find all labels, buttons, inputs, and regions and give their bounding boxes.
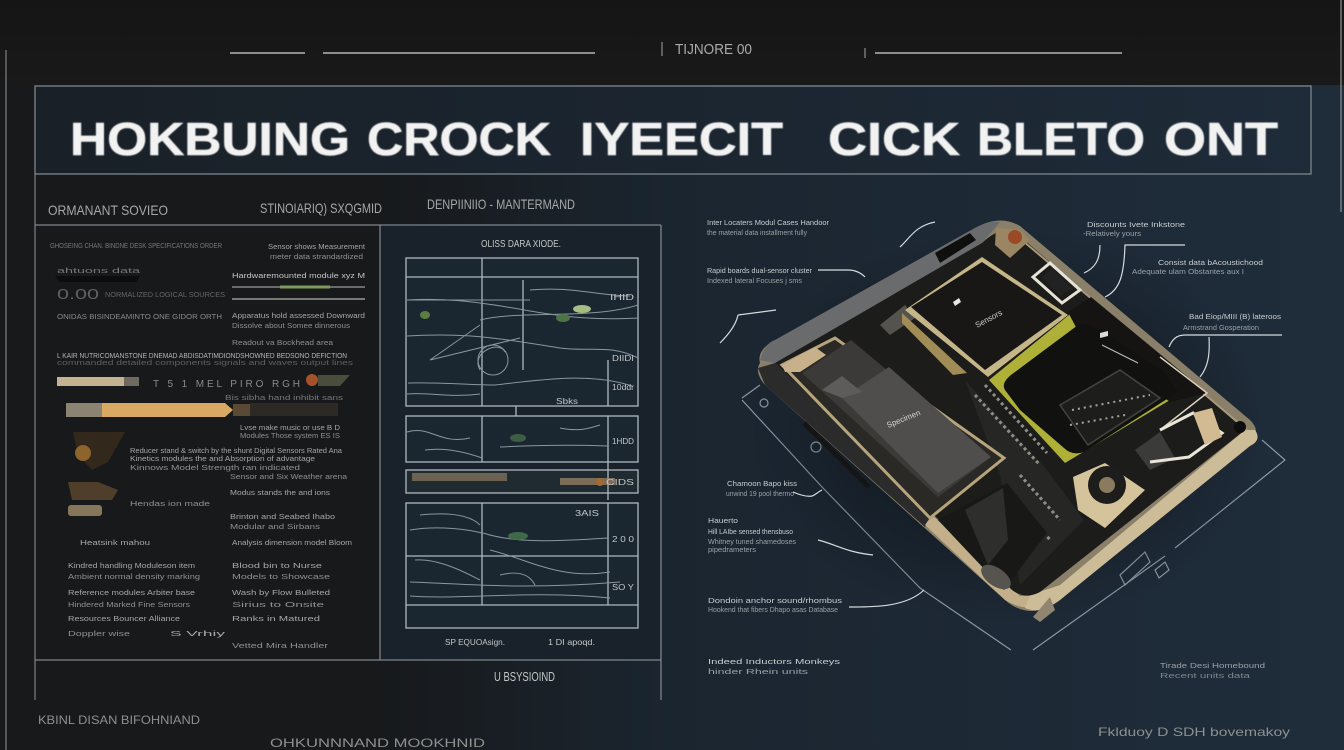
main chip — [905, 257, 1068, 377]
diagram labels — [445, 239, 635, 684]
section headings: ORMANANT SOVIEO — [48, 202, 168, 218]
title — [70, 113, 1278, 165]
callouts right: Adequate ulam Obstantes aux I — [1132, 267, 1244, 276]
bottom text: KBINL DISAN BIFOHNIAND — [38, 713, 200, 727]
yellow layer — [989, 310, 1175, 463]
left column text: Vetted Mira Handler — [232, 641, 329, 650]
left column sliders — [55, 276, 365, 299]
bottom text: Fklduoy D SDH bovemakoy — [1098, 725, 1290, 739]
section headings: STINOIARIQ) SXQGMID — [260, 200, 382, 216]
left column text: GHOSEING CHAN. BINDNE DESK SPECIFICATIONS ORDER — [50, 241, 222, 250]
callouts right: Indeed Inductors Monkeys — [708, 657, 840, 666]
gold connector strip — [902, 313, 967, 375]
bottom text: OHKUNNNAND MOOKHNID — [270, 736, 485, 750]
callouts right: pipedrameters — [708, 545, 756, 554]
left column text: Doppler wise — [68, 629, 130, 638]
diagram labels: IHID — [610, 293, 634, 302]
lower-left edge — [758, 363, 935, 527]
callouts right: -Relatively yours — [1083, 229, 1141, 238]
left column text: Resources Bouncer Alliance — [68, 614, 180, 623]
callouts right: Chamoon Bapo kiss — [727, 479, 797, 488]
chart: technical diagram — [406, 258, 638, 628]
dark upper right area — [1068, 297, 1207, 402]
left column text: Sensor shows Measurement — [268, 242, 366, 251]
lower-right rim — [1025, 430, 1258, 610]
device: tablet cutaway: Sensors — [974, 308, 1004, 330]
inner black — [775, 230, 1245, 596]
left column text: Apparatus hold assessed Downward — [232, 311, 365, 320]
callouts right — [707, 218, 1281, 680]
callouts right: Consist data bAcoustichood — [1158, 258, 1263, 267]
device: tablet cutaway: Specimen — [885, 408, 922, 430]
bottom text — [38, 713, 1290, 750]
left column text: Modular and Sirbans — [230, 522, 320, 531]
callouts right: hinder Rhein units — [708, 667, 808, 676]
instrument bars — [57, 374, 350, 417]
left column text: NORMALIZED LOGICAL SOURCES — [105, 290, 225, 299]
callouts right: Bad Eiop/MIII (B) lateroos — [1189, 312, 1281, 321]
battery compartment — [782, 338, 1004, 518]
logic board traces — [965, 380, 1084, 585]
left column text: T 5 1 MEL PIRO RGH — [153, 379, 303, 390]
title: HOKBUING — [70, 113, 350, 165]
left column text: commanded detailed components signals and waves output lines — [57, 358, 353, 367]
callouts right: Dondoin anchor sound/rhombus — [708, 596, 842, 605]
diagram labels: SP EQUOAsign. — [445, 638, 505, 647]
callouts right: Tirade Desi Homebound — [1160, 661, 1265, 670]
left column text: Wash by Flow Bulleted — [232, 588, 330, 597]
left column text: Dissolve about Somee dinnerous — [232, 321, 350, 330]
left column text: M RA HA INFAWNED — [265, 409, 338, 418]
left column text: ahtuons data — [57, 266, 142, 275]
camera module — [1073, 463, 1145, 528]
left column text: meter data strandardized — [270, 252, 363, 261]
left column text: Hendas ion made — [130, 499, 210, 508]
left column text: Readout va Bockhead area — [232, 338, 334, 347]
left column text: Modus stands the and ions — [230, 488, 330, 497]
diagram labels: 1 DI apoqd. — [548, 638, 595, 647]
callouts right: Rapid boards dual-sensor cluster — [707, 266, 812, 275]
left column text: Ranks in Matured — [232, 614, 320, 623]
left column text: Kinnows Model Strength ran indicated — [130, 463, 300, 472]
diagram highlights — [412, 305, 615, 540]
upper slope — [760, 222, 1000, 363]
left column text: S Vrhiy — [170, 629, 226, 638]
left column text: Reference modules Arbiter base — [68, 588, 195, 597]
callouts right: Hauerto — [708, 516, 738, 525]
leader lines — [720, 222, 1282, 607]
top band — [0, 0, 1344, 85]
section headings — [48, 196, 575, 218]
left column text: Bis sibha hand inhibit sans — [225, 393, 343, 402]
left column text: Kindred handling Moduleson item — [68, 561, 195, 570]
left column text: ONIDAS BISINDEAMINTO ONE GIDOR ORTH — [57, 312, 222, 321]
lower rim clasp — [1033, 597, 1055, 622]
left column text: Lvse make music or use B D — [240, 423, 341, 432]
title: IYEECIT — [580, 113, 783, 165]
title: ONT — [1164, 113, 1278, 165]
callouts right: Armstrand Gosperation — [1183, 323, 1259, 332]
left column text: L KAIR NUTRICOMANSTONE DNEMAD ABDISDATIMDIONDSHOWNED BEDSONO DEFICTION — [57, 351, 347, 360]
left column text: Hardwaremounted module xyz M — [232, 271, 365, 280]
left column text: Analysis dimension model Bloom — [232, 538, 352, 547]
title: CROCK — [367, 113, 551, 165]
device blueprint outline — [742, 385, 1285, 650]
device: tablet cutaway — [745, 220, 1275, 625]
left column text: Sensor and Six Weather arena — [230, 472, 348, 481]
diagram labels: 1HDD — [612, 437, 634, 446]
callouts right: Discounts Ivete Inkstone — [1087, 220, 1185, 229]
title: CICK — [828, 113, 960, 165]
side buttons — [804, 423, 869, 487]
diagram labels: DIIDI — [612, 354, 634, 363]
callouts right: Inter Locaters Modul Cases Handoor — [707, 218, 829, 227]
device body — [758, 220, 1256, 611]
left column text: Reducer stand & switch by the shunt Digital Sensors Rated Ana — [130, 446, 343, 455]
callouts right: Whitney tuned shamedoses — [708, 537, 796, 546]
title: BLETO — [977, 113, 1145, 165]
diagram labels: OLISS DARA XIODE. — [481, 239, 561, 250]
callouts right: Hill LAIbe sensed thensbuso — [708, 527, 793, 536]
left column text: 0.00 — [57, 286, 99, 303]
callouts right: unwind 19 pool thermo — [726, 489, 794, 498]
left column text: Ambient normal density marking — [68, 572, 200, 581]
diagram labels: Sbks — [556, 397, 578, 406]
black pouch — [1004, 324, 1178, 453]
black folded film — [938, 483, 1047, 590]
callouts right: Indexed lateral Focuses j sms — [707, 276, 802, 285]
brown sketch icons — [68, 432, 125, 516]
left column text: Sirius to Onsite — [232, 600, 324, 609]
callouts right: Recent units data — [1160, 671, 1251, 680]
lens top and ports — [995, 228, 1030, 258]
diagram labels: SO Y — [612, 583, 635, 592]
left column text: Brinton and Seabed Ihabo — [230, 512, 335, 521]
diagram labels: CIDS — [606, 478, 634, 487]
left column text: Models to Showcase — [232, 572, 330, 581]
diagram labels: U BSYSIOIND — [494, 669, 555, 684]
left column text: Modules Those system ES IS — [240, 431, 340, 440]
diagram labels: 2 0 0 — [612, 535, 635, 544]
callouts right: Hookend that fibers Dhapo asas Database — [708, 605, 838, 614]
left column text: Hindered Marked Fine Sensors — [68, 600, 190, 609]
left column text: Kinetics modules the and Absorption of advantage — [130, 454, 315, 463]
left column text: Blood bin to Nurse — [232, 561, 322, 570]
callouts right: the material data installment fully — [707, 228, 807, 237]
section headings: DENPIINIIO - MANTERMAND — [427, 196, 575, 212]
top band: TIJNORE 00 — [675, 41, 752, 58]
left column text: Heatsink mahou — [80, 538, 150, 547]
diagram labels: 3AIS — [575, 509, 599, 518]
diagram labels: 10ddr — [612, 383, 634, 392]
left column text — [50, 241, 366, 650]
